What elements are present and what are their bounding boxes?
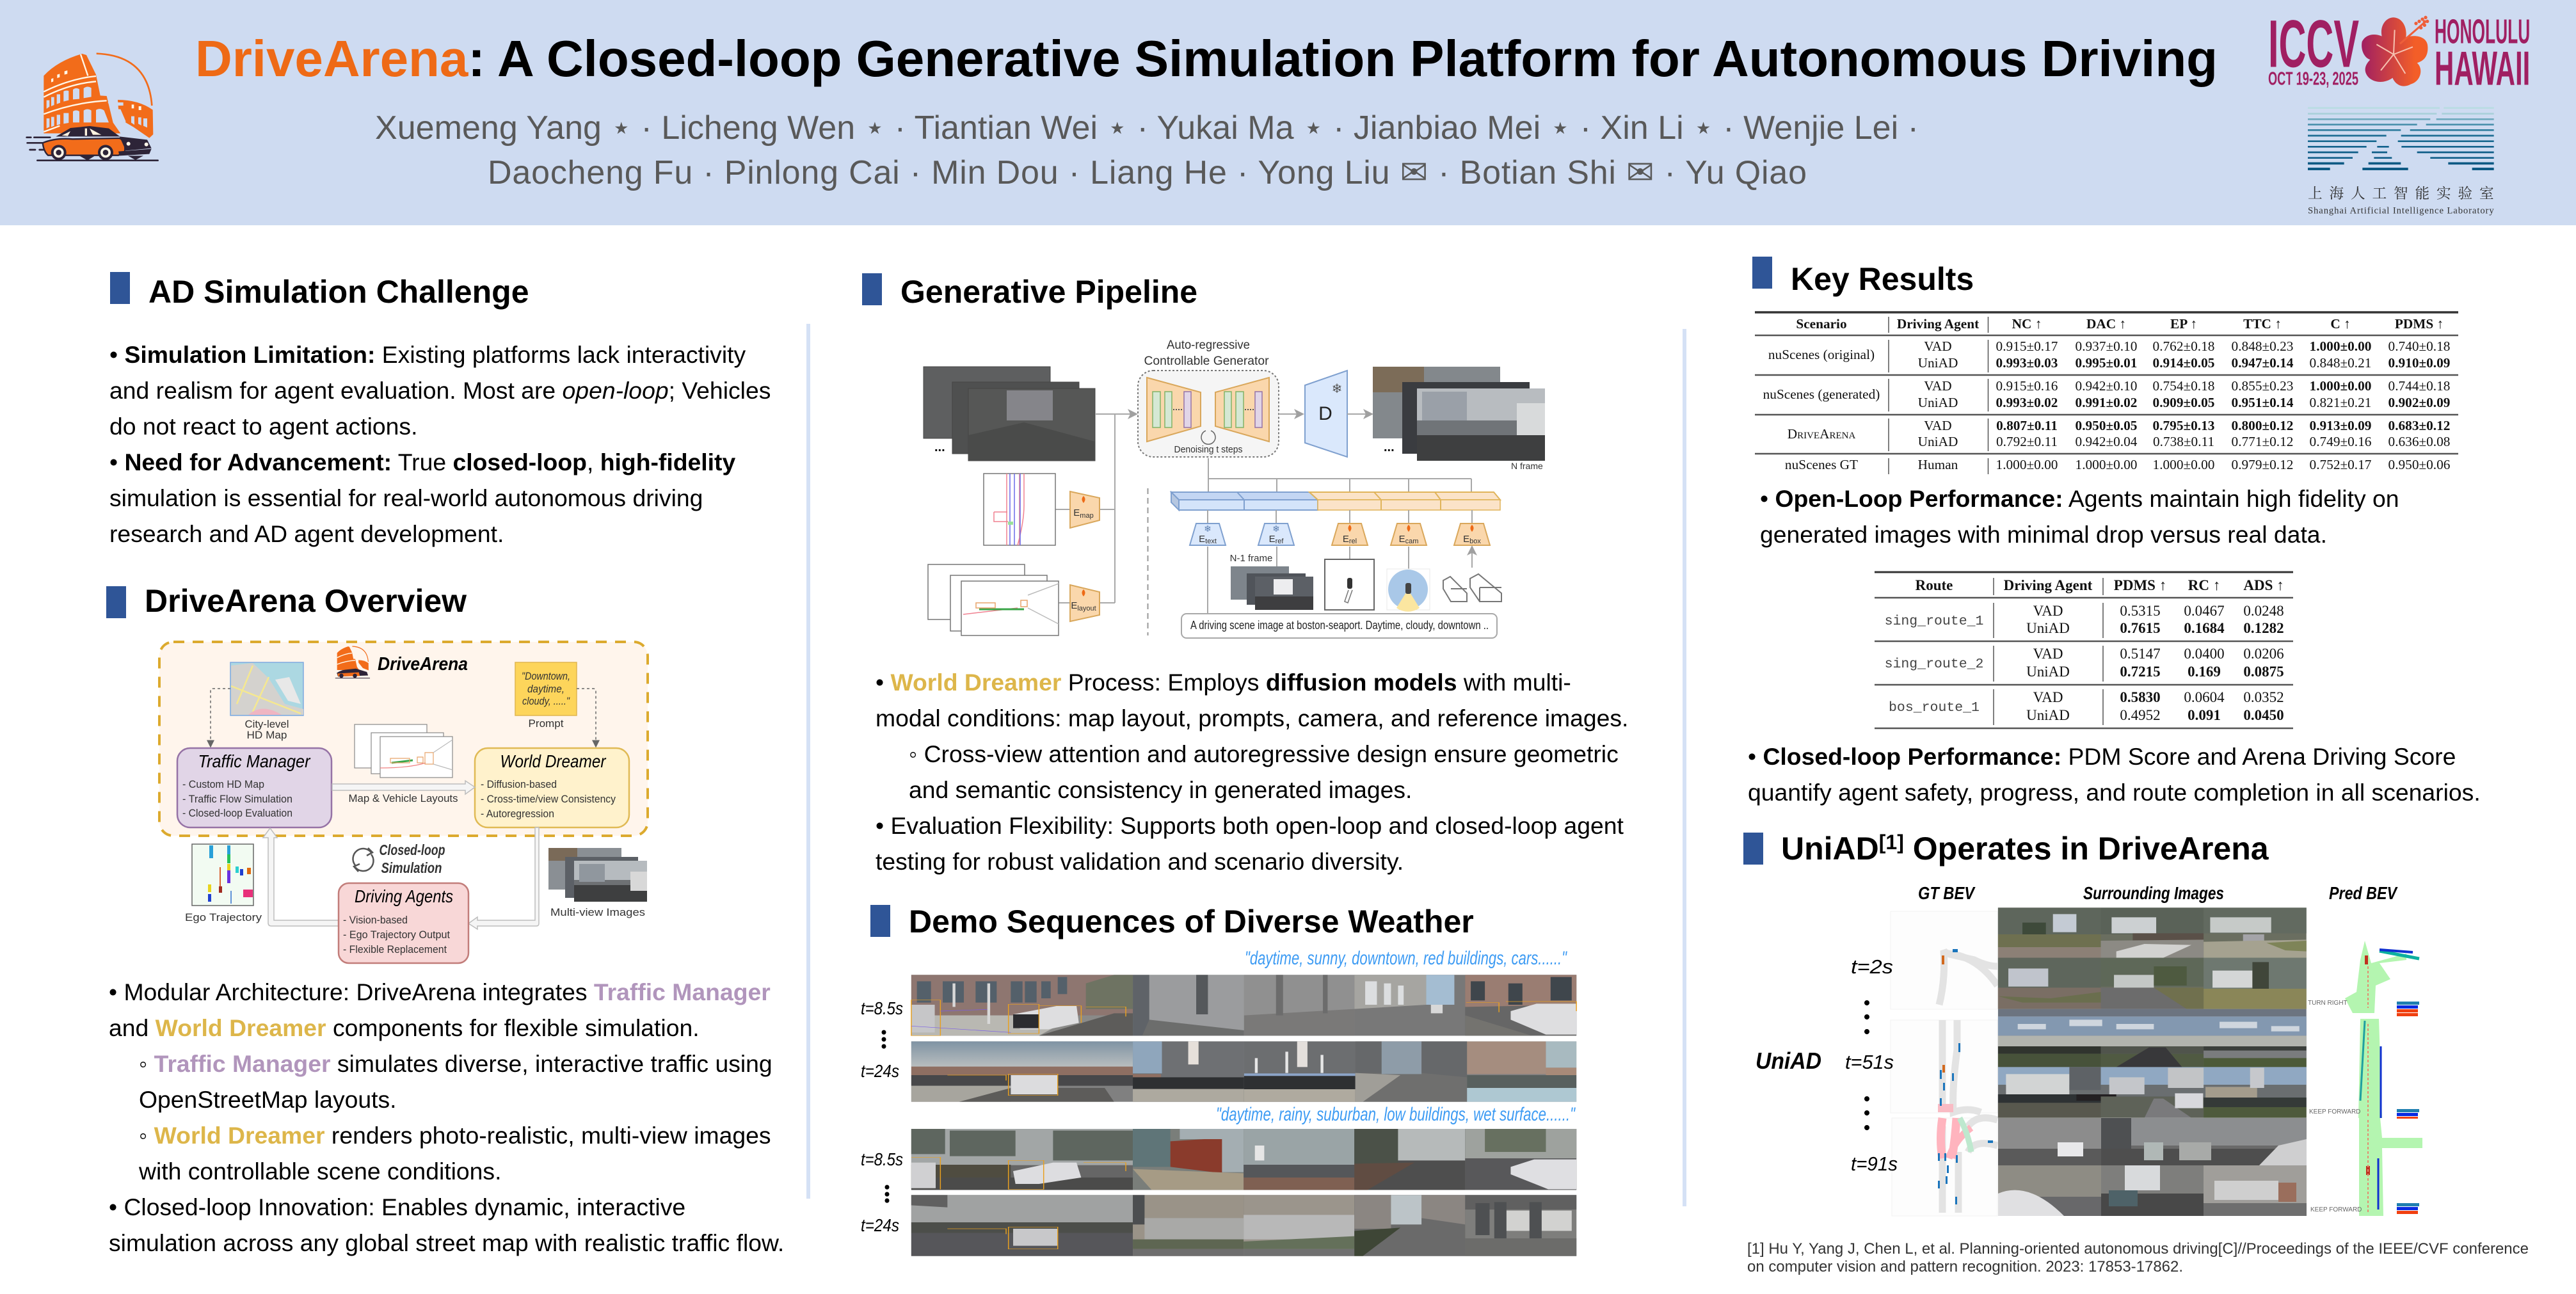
encoders: conditions: ❄ <box>1272 523 1280 534</box>
text block: closed-loop performance: quantify agent safety, progress, and route completion in all scenarios. <box>1748 779 2481 806</box>
connector: encoders to tokens <box>1208 510 1472 523</box>
labels: time stamps: t=8.5s <box>861 998 903 1018</box>
table: open-loop results: 0.738±0.11 <box>2153 434 2214 449</box>
table: open-loop results: 0.993±0.03 <box>1996 355 2058 371</box>
encoders: conditions: E <box>1199 534 1205 545</box>
token bar <box>1171 492 1500 510</box>
table: open-loop results: 0.821±0.21 <box>2310 395 2371 410</box>
table: open-loop results: 0.914±0.05 <box>2153 355 2214 371</box>
labels: time stamps: t=8.5s <box>861 1149 903 1169</box>
table: closed-loop results: sing_route_2 <box>1885 657 1983 672</box>
table: open-loop results: 0.754±0.18 <box>2153 378 2214 394</box>
text block: • Closed-loop Innovation: Enables dynamic, interactive <box>109 1194 685 1220</box>
box: World Dreamer <box>475 748 629 827</box>
image: ego trajectory <box>192 844 253 906</box>
image: layout condition <box>928 564 1059 635</box>
table: open-loop results: 0.915±0.16 <box>1996 378 2058 394</box>
encoder: E layout: E <box>1071 600 1077 611</box>
box: World Dreamer: World Dreamer <box>500 751 607 771</box>
table: closed-loop results: VAD <box>2033 689 2063 705</box>
table: open-loop results: Scenario <box>1796 316 1847 331</box>
table: open-loop results: 0.950±0.06 <box>2388 457 2451 472</box>
logo: Shanghai AI Laboratory <box>2308 108 2494 216</box>
label: N frame: N frame <box>1511 461 1543 471</box>
table: closed-loop results: 0.5147 <box>2120 646 2161 662</box>
table: closed-loop results: 0.1684 <box>2184 620 2225 636</box>
image: camera view <box>1387 569 1430 612</box>
arrow: agents to traffic manager <box>263 828 339 926</box>
table: open-loop results: 0.902±0.09 <box>2388 395 2450 410</box>
heading: Operates in DriveArena <box>1904 831 2269 867</box>
text block: closed-loop performance: • Closed-loop Performance: PDM Score and Arena Driving Score <box>1748 743 2456 770</box>
text block <box>876 669 1628 875</box>
table: open-loop results: 1.000±0.00 <box>1996 457 2058 472</box>
panel: Demo Sequences of Diverse Weather <box>861 904 1576 1256</box>
chart: Pred BEV panels <box>2307 907 2422 1216</box>
text block: open-loop performance: • Open-Loop Performance: Agents maintain high fidelity on <box>1760 485 2399 512</box>
table: closed-loop results: sing_route_1 <box>1885 614 1983 629</box>
arrow: generator to decoder <box>1279 413 1303 415</box>
connector: tokens to generator <box>1208 458 1471 492</box>
icon: heading bar <box>862 273 882 305</box>
table: open-loop results: 0.636±0.08 <box>2388 434 2450 449</box>
reference footnote <box>1747 1240 2529 1275</box>
table: open-loop results: 0.771±0.12 <box>2232 434 2293 449</box>
labels: time stamps: t=24s <box>861 1061 899 1081</box>
image: reference frames <box>1231 566 1313 610</box>
image: city-level HD map <box>230 662 303 715</box>
prompt note: cloudy, ....." <box>522 695 570 707</box>
labels: time stamps <box>861 998 903 1235</box>
table: open-loop results: 0.942±0.04 <box>2076 434 2138 449</box>
arrow: prompt to world dreamer <box>577 689 596 747</box>
table: closed-loop results: PDMS ↑ <box>2114 577 2166 593</box>
text block: • Evaluation Flexibility: Supports both open-loop and closed-loop agent <box>876 812 1624 839</box>
table: open-loop results: 0.910±0.09 <box>2388 355 2450 371</box>
table: open-loop results: 0.993±0.02 <box>1996 395 2058 410</box>
text block: • Modular Architecture: DriveArena integrates Traffic Manager <box>109 978 771 1005</box>
table: open-loop results: Driving Agent <box>1897 316 1979 331</box>
text block <box>109 341 771 547</box>
table: open-loop results: nuScenes (original) <box>1768 347 1875 362</box>
text block: testing for robust validation and scenario diversity. <box>876 848 1404 875</box>
icon: heading bar <box>106 586 126 618</box>
heading: Generative Pipeline <box>900 274 1197 310</box>
box: Traffic Manager: - Traffic Flow Simulation <box>182 793 292 805</box>
text block: ◦ Cross-view attention and autoregressive design ensure geometric <box>909 740 1619 767</box>
image strip: rainy t=8.5s <box>911 1129 1576 1190</box>
heading: Key Results <box>1791 261 1974 297</box>
table: open-loop results: 0.848±0.23 <box>2232 339 2293 354</box>
table: closed-loop results: 0.0467 <box>2184 603 2225 619</box>
table: closed-loop results: UniAD <box>2026 707 2070 723</box>
image: output frames: ... <box>1384 440 1395 454</box>
table: closed-loop results: 0.7615 <box>2120 620 2161 636</box>
table: open-loop results: DriveArena <box>1788 426 1855 442</box>
table: open-loop results <box>1755 312 2458 474</box>
label: closed-loop simulation <box>379 842 445 876</box>
label: generator title: Auto-regressive <box>1167 339 1250 352</box>
label: city-level HD map: HD Map <box>247 729 287 741</box>
labels: column titles: Surrounding Images <box>2083 883 2224 903</box>
table: closed-loop results: 0.0875 <box>2243 664 2284 680</box>
prompt note: daytime, <box>527 683 564 695</box>
heading: DriveArena Overview <box>145 583 467 619</box>
chart: GT BEV panels <box>1891 911 1997 1216</box>
text block: with controllable scene conditions. <box>138 1158 501 1185</box>
arrow: layouts to world dreamer <box>332 781 475 794</box>
table: closed-loop results: VAD <box>2033 646 2063 662</box>
text block: do not react to agent actions. <box>109 413 417 440</box>
table: open-loop results: VAD <box>1924 418 1952 433</box>
image: noisy latents <box>924 367 1095 461</box>
arrow: world dreamer to agents <box>468 827 539 929</box>
prompt note <box>515 662 577 715</box>
encoders: conditions <box>1190 523 1490 545</box>
image: map condition <box>984 474 1055 545</box>
labels: column titles: GT BEV <box>1918 883 1976 903</box>
table: open-loop results: PDMS ↑ <box>2395 316 2444 331</box>
box: Driving Agents: - Vision-based <box>343 914 408 926</box>
box: decoder D: ❄ <box>1332 382 1342 396</box>
labels: column titles: Pred BEV <box>2329 883 2398 903</box>
text block: • World Dreamer Process: Employs diffusion models with multi- <box>876 669 1571 696</box>
column divider left <box>806 324 810 1199</box>
encoder: E map <box>1070 491 1100 528</box>
label: generator title: Controllable Generator <box>1144 355 1269 368</box>
heading: [1] <box>1879 831 1904 854</box>
icon: heading bar <box>1752 257 1772 289</box>
table: closed-loop results: ADS ↑ <box>2243 577 2284 593</box>
table: open-loop results: 0.855±0.23 <box>2232 378 2293 394</box>
logo: ICCV Honolulu Hawaii: ICCV <box>2268 6 2359 81</box>
table: closed-loop results: 0.1282 <box>2243 620 2284 636</box>
table: open-loop results: 0.752±0.17 <box>2310 457 2372 472</box>
box: decoder D: D <box>1318 403 1332 424</box>
panel: AD Simulation Challenge <box>109 272 771 547</box>
text block: and semantic consistency in generated images. <box>909 776 1412 803</box>
table: closed-loop results: 0.0604 <box>2184 689 2225 705</box>
table: open-loop results: 0.740±0.18 <box>2388 339 2450 354</box>
table: open-loop results: 1.000±0.00 <box>2310 378 2371 394</box>
text block: ◦ World Dreamer renders photo-realistic, multi-view images <box>139 1122 771 1149</box>
connector: conditions to noise <box>1055 414 1115 603</box>
table: closed-loop results: 0.0206 <box>2243 646 2284 662</box>
labels: UniAD and time stamps: t=91s <box>1851 1153 1898 1175</box>
table: open-loop results: 0.947±0.14 <box>2232 355 2294 371</box>
text block <box>109 978 784 1256</box>
icon: heading bar <box>1743 833 1763 865</box>
table: open-loop results: 1.000±0.00 <box>2310 339 2371 354</box>
label: closed-loop simulation: Simulation <box>381 859 442 876</box>
table: open-loop results: EP ↑ <box>2170 316 2197 331</box>
box: World Dreamer: - Cross-time/view Consistency <box>481 793 616 805</box>
table: open-loop results: 0.762±0.18 <box>2153 339 2214 354</box>
box: Driving Agents: - Flexible Replacement <box>343 943 447 955</box>
text block: • Need for Advancement: True closed-loop, high-fidelity <box>109 449 735 475</box>
reference footnote: [1] Hu Y, Yang J, Chen L, et al. Planning-oriented autonomous driving[C]//Proceedings of the IEEE/CVF conference <box>1747 1240 2529 1258</box>
table: closed-loop results: 0.0352 <box>2243 689 2284 705</box>
encoders: conditions: E <box>1343 534 1349 545</box>
label: prompt: Prompt <box>529 717 564 730</box>
labels: time stamps: t=24s <box>861 1215 899 1235</box>
arrow: decoder to output <box>1347 413 1372 415</box>
image: output frames <box>1373 367 1545 461</box>
icon: small logo <box>335 646 370 678</box>
image: multi-view images <box>548 848 647 902</box>
table: closed-loop results: 0.0400 <box>2184 646 2225 662</box>
image strip: sunny t=24s <box>911 1041 1576 1102</box>
text block: research and AD agent development. <box>109 520 504 547</box>
image: relative pose <box>1325 559 1374 610</box>
table: closed-loop results: UniAD <box>2026 620 2070 636</box>
table: open-loop results: Human <box>1918 457 1958 472</box>
table: open-loop results: 0.991±0.02 <box>2076 395 2137 410</box>
prompt note: "Downtown, <box>522 670 570 682</box>
box: Driving Agents <box>339 883 468 963</box>
table: open-loop results: VAD <box>1924 378 1952 394</box>
table: closed-loop results <box>1875 572 2293 728</box>
box: Driving Agents: Driving Agents <box>355 886 453 906</box>
encoders: conditions: E <box>1463 534 1469 545</box>
table: closed-loop results: 0.5830 <box>2120 689 2161 705</box>
table: open-loop results: 0.950±0.05 <box>2076 418 2137 433</box>
image: layout frames <box>355 724 452 778</box>
chart: Pred BEV panels: KEEP FORWARD <box>2309 1108 2360 1115</box>
labels: UniAD and time stamps <box>1756 955 1898 1175</box>
arrow: noise to generator <box>1095 413 1137 415</box>
logo: ICCV Honolulu Hawaii <box>2268 6 2530 95</box>
label: generator title <box>1144 339 1269 368</box>
text block: • Simulation Limitation: Existing platforms lack interactivity <box>109 341 746 368</box>
table: open-loop results: 0.979±0.12 <box>2232 457 2293 472</box>
table: open-loop results: VAD <box>1924 339 1952 354</box>
image: surrounding camera grid t=91s <box>1998 1118 2307 1216</box>
authors line 2: Daocheng Fu · Pinlong Cai · Min Dou · Liang He · Yong Liu ✉ · Botian Shi ✉ · Yu Qiao <box>488 154 1807 191</box>
box: generator U-Net <box>1138 371 1279 457</box>
table: open-loop results: 0.937±0.10 <box>2076 339 2137 354</box>
table: open-loop results: 0.909±0.05 <box>2153 395 2214 410</box>
heading: UniAD <box>1781 831 1879 867</box>
panel: DriveArena Overview <box>106 583 784 1256</box>
image: 3D boxes <box>1443 574 1501 602</box>
authors line 1: Xuemeng Yang ⋆ · Licheng Wen ⋆ · Tiantian Wei ⋆ · Yukai Ma ⋆ · Jianbiao Mei ⋆ · Xin Li ⋆ · Wenjie Lei · <box>375 109 1919 147</box>
logo: Shanghai AI Laboratory: Shanghai Artificial Intelligence Laboratory <box>2308 205 2494 216</box>
encoder: E map: map <box>1080 512 1094 520</box>
text block: closed-loop performance <box>1748 743 2481 806</box>
encoders: conditions: text <box>1205 538 1217 545</box>
title: DriveArena: A Closed-loop Generative Simulation Platform for Autonomous Driving <box>195 30 2218 87</box>
table: closed-loop results: 0.0248 <box>2243 603 2284 619</box>
encoders: conditions: ref <box>1276 538 1284 545</box>
box: Traffic Manager <box>177 748 332 827</box>
image: surrounding camera grid t=51s <box>1998 1016 2307 1118</box>
label: city-level HD map <box>244 718 289 741</box>
table: open-loop results: TTC ↑ <box>2243 316 2282 331</box>
connector: inputs to encoders <box>1208 547 1472 613</box>
box: Traffic Manager: Traffic Manager <box>198 751 311 771</box>
table: open-loop results: 0.913±0.09 <box>2310 418 2371 433</box>
encoders: conditions: ❄ <box>1204 523 1212 534</box>
column divider middle <box>1683 329 1686 1206</box>
logo: ICCV Honolulu Hawaii: OCT 19-23, 2025 <box>2268 68 2358 89</box>
panel: UniAD Operates in DriveArena <box>1743 831 2422 1216</box>
table: open-loop results: 1.000±0.00 <box>2076 457 2137 472</box>
encoders: conditions: box <box>1469 538 1481 545</box>
image strip: rainy t=24s <box>911 1195 1576 1256</box>
image: surrounding camera grid t=2s <box>1998 907 2307 1016</box>
icon: heading bar <box>870 905 890 937</box>
labels: UniAD and time stamps: t=51s <box>1845 1051 1894 1073</box>
table: closed-loop results: 0.091 <box>2188 707 2221 723</box>
table: closed-loop results: RC ↑ <box>2188 577 2220 593</box>
prompt text box: A driving scene image at boston-seaport. Daytime, cloudy, downtown .. <box>1190 619 1489 632</box>
prompt text box <box>1181 614 1497 638</box>
table: open-loop results: 0.792±0.11 <box>1996 434 2058 449</box>
table: closed-loop results: 0.5315 <box>2120 603 2161 619</box>
table: open-loop results: UniAD <box>1918 434 1958 449</box>
table: open-loop results: UniAD <box>1918 355 1958 371</box>
table: open-loop results: UniAD <box>1918 395 1958 410</box>
panel: Key Results <box>1748 257 2481 806</box>
text block: and World Dreamer components for flexible simulation. <box>109 1014 700 1041</box>
table: open-loop results: nuScenes (generated) <box>1763 387 1880 402</box>
table: open-loop results: 0.800±0.12 <box>2232 418 2293 433</box>
table: open-loop results: 1.000±0.00 <box>2153 457 2214 472</box>
diagram: DriveArena architecture <box>159 642 648 963</box>
divider: condition split <box>1147 488 1148 635</box>
encoder: E map: E <box>1073 507 1080 518</box>
encoder: E layout: layout <box>1077 605 1096 612</box>
table: closed-loop results: bos_route_1 <box>1889 700 1980 715</box>
box: Driving Agents: - Ego Trajectory Output <box>343 929 450 941</box>
prompt quote: sunny: "daytime, sunny, downtown, red buildings, cars......" <box>1245 948 1567 969</box>
table: open-loop results: 0.807±0.11 <box>1996 418 2058 433</box>
chart: Pred BEV panels: TURN RIGHT <box>2308 1000 2348 1007</box>
table: closed-loop results: 0.4952 <box>2120 707 2161 723</box>
labels: column titles <box>1918 883 2398 903</box>
text block: simulation across any global street map with realistic traffic flow. <box>109 1229 784 1256</box>
image: noisy latents: ... <box>934 440 945 454</box>
reference footnote: on computer vision and pattern recognition. 2023: 17853-17862. <box>1747 1258 2183 1275</box>
text block: and realism for agent evaluation. Most are open-loop; Vehicles <box>109 377 771 404</box>
table: open-loop results: 0.795±0.13 <box>2153 418 2214 433</box>
text block: modal conditions: map layout, prompts, camera, and reference images. <box>876 705 1628 731</box>
panel: Generative Pipeline <box>862 273 1628 875</box>
table: open-loop results: 0.683±0.12 <box>2388 418 2450 433</box>
label: DriveArena: DriveArena <box>378 654 468 675</box>
table: open-loop results: 0.942±0.10 <box>2076 378 2137 394</box>
table: closed-loop results: 0.7215 <box>2120 664 2161 680</box>
icon: heading bar <box>110 272 130 304</box>
labels: UniAD and time stamps: t=2s <box>1851 955 1893 978</box>
label: closed-loop simulation: Closed-loop <box>379 842 445 858</box>
table: open-loop results: 0.951±0.14 <box>2232 395 2294 410</box>
encoders: conditions: rel <box>1349 538 1357 545</box>
box: Traffic Manager: - Closed-loop Evaluation <box>182 807 292 819</box>
text block: simulation is essential for real-world autonomous driving <box>109 484 703 511</box>
table: closed-loop results: 0.0450 <box>2243 707 2284 723</box>
table: open-loop results: 0.848±0.21 <box>2310 355 2371 371</box>
table: open-loop results: nuScenes GT <box>1785 457 1858 472</box>
table: closed-loop results: VAD <box>2033 603 2063 619</box>
box: World Dreamer: - Diffusion-based <box>481 778 557 790</box>
table: closed-loop results: 0.169 <box>2188 664 2221 680</box>
box: Traffic Manager: - Custom HD Map <box>182 778 264 790</box>
table: closed-loop results: Route <box>1916 577 1953 593</box>
chart: Pred BEV panels: KEEP FORWARD <box>2310 1206 2362 1213</box>
table: open-loop results: 0.995±0.01 <box>2076 355 2137 371</box>
encoder: E layout <box>1070 585 1100 621</box>
encoders: conditions: E <box>1399 534 1405 545</box>
text block: open-loop performance <box>1760 485 2399 548</box>
prompt quote: rainy: "daytime, rainy, suburban, low buildings, wet surface......" <box>1216 1104 1576 1125</box>
table: open-loop results: C ↑ <box>2330 316 2351 331</box>
table: closed-loop results: Driving Agent <box>2004 577 2093 593</box>
label: N-1 frame: N-1 frame <box>1230 553 1272 564</box>
label: city-level HD map: City-level <box>244 718 289 730</box>
table: open-loop results: 0.744±0.18 <box>2388 378 2450 394</box>
box: decoder D <box>1305 371 1347 457</box>
text block: OpenStreetMap layouts. <box>139 1086 397 1113</box>
label: multi-view images: Multi-view Images <box>550 906 645 918</box>
text block: open-loop performance: generated images with minimal drop versus real data. <box>1760 521 2327 548</box>
table: open-loop results: DAC ↑ <box>2086 316 2126 331</box>
image strip: sunny t=8.5s <box>911 975 1576 1035</box>
text block: ◦ Traffic Manager simulates diverse, interactive traffic using <box>139 1050 772 1077</box>
table: open-loop results: 0.915±0.17 <box>1996 339 2058 354</box>
label: ego trajectory: Ego Trajectory <box>185 911 262 923</box>
box: generator U-Net: Denoising t steps <box>1174 444 1243 455</box>
arrow: map to traffic manager <box>211 689 230 747</box>
labels: UniAD and time stamps: UniAD <box>1756 1048 1821 1074</box>
encoders: conditions: E <box>1269 534 1276 545</box>
heading: Demo Sequences of Diverse Weather <box>909 904 1474 939</box>
diagram: generative pipeline <box>924 339 1545 638</box>
encoders: conditions: cam <box>1405 538 1418 545</box>
table: open-loop results: 0.749±0.16 <box>2310 434 2372 449</box>
logo: Shanghai AI Laboratory: 上海人工智能实验室 <box>2308 182 2494 203</box>
table: closed-loop results: UniAD <box>2026 664 2070 680</box>
heading: AD Simulation Challenge <box>148 274 529 310</box>
logo: DriveArena colosseum and car <box>27 54 158 161</box>
label: Map and Vehicle Layouts: Map & Vehicle Layouts <box>348 792 458 804</box>
box: World Dreamer: - Autoregression <box>481 808 554 820</box>
header band <box>0 0 2576 225</box>
table: open-loop results: NC ↑ <box>2012 316 2042 331</box>
icon: closed-loop cycle <box>353 848 374 872</box>
